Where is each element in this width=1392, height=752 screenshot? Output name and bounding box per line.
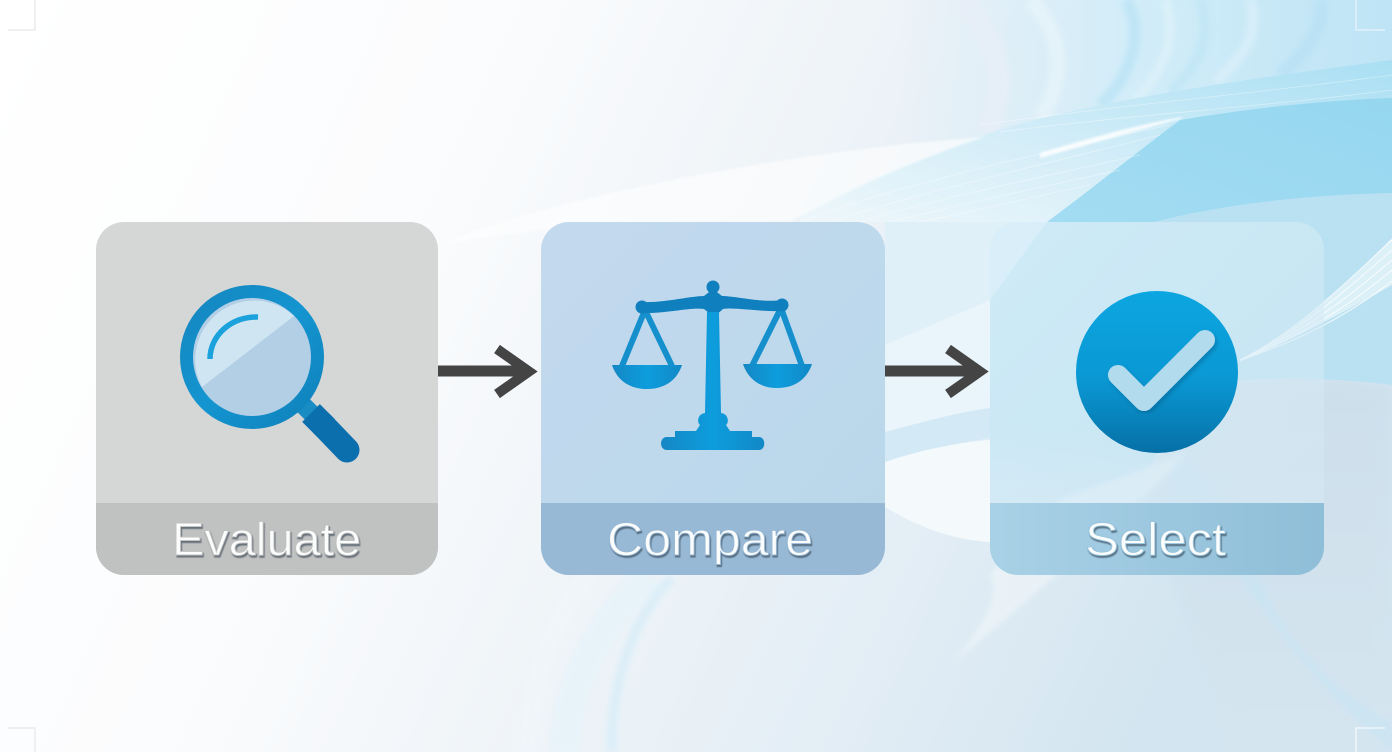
- panel: Select: [990, 222, 1324, 575]
- card body: Select: [990, 222, 1324, 575]
- icon: check mark in circle: [1076, 291, 1238, 453]
- card body: Compare: [541, 222, 885, 575]
- icon: balance scales: [612, 280, 812, 450]
- label: Evaluate: Evaluate: [172, 513, 361, 565]
- card body: Evaluate: [96, 222, 438, 575]
- arrow: Compare to Select: [885, 349, 980, 394]
- label: Compare: Compare: [607, 513, 813, 565]
- arrow: Evaluate to Compare: [438, 349, 529, 394]
- label band: Evaluate: [96, 503, 438, 575]
- icon: magnifying glass: [180, 285, 347, 450]
- panel: Compare: [541, 222, 885, 575]
- label band: Select: [990, 503, 1324, 575]
- label: Select: Select: [1085, 513, 1226, 565]
- panel: Evaluate: [96, 222, 438, 575]
- label band: Compare: [541, 503, 885, 575]
